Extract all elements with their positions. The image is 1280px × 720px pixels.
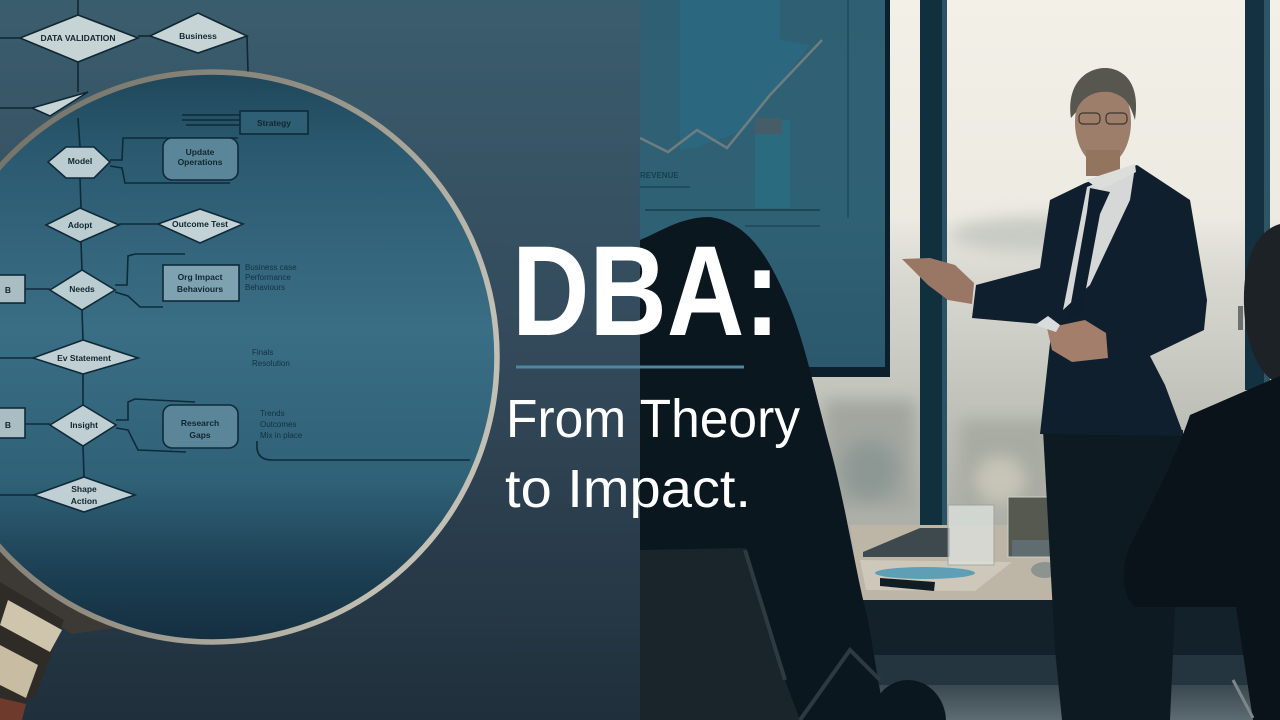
flowchart labels: Action — [71, 496, 97, 506]
flowchart labels: Shape — [71, 484, 97, 494]
subtitle line two: to Impact. — [505, 459, 751, 519]
hair — [1070, 68, 1136, 120]
lens — [0, 74, 495, 640]
flowchart labels: Finals — [252, 348, 273, 357]
flowchart behind lens: Business — [179, 31, 217, 41]
flowchart labels: Mix in place — [260, 431, 303, 440]
flowchart labels: B — [5, 420, 11, 430]
flowchart labels: B — [5, 285, 11, 295]
window frames — [920, 0, 1270, 526]
tie — [1071, 188, 1110, 302]
flowchart labels: Adopt — [68, 220, 92, 230]
flowchart behind lens — [0, 0, 248, 116]
flowchart labels: Ev Statement — [57, 353, 111, 363]
flowchart labels: Trends — [260, 409, 285, 418]
flowchart labels: Outcome Test — [172, 219, 228, 229]
glasses — [1079, 113, 1127, 124]
flowchart labels: Insight — [70, 420, 98, 430]
magnifying glass — [0, 72, 497, 720]
flowchart labels: Strategy — [257, 118, 291, 128]
flowchart labels: Business case — [245, 263, 297, 272]
face — [1075, 92, 1131, 157]
flowchart labels: Behaviours — [245, 283, 285, 292]
trousers — [1043, 430, 1183, 720]
water glasses — [948, 496, 1051, 578]
silhouette: seated woman foreground — [640, 217, 946, 720]
panel: left slate background — [0, 0, 640, 720]
flowchart labels: Performance — [245, 273, 291, 282]
flowchart labels — [5, 118, 303, 506]
accent divider line — [516, 366, 744, 368]
flowchart labels: Model — [68, 156, 92, 166]
chair — [640, 548, 800, 720]
laptop on table — [863, 528, 950, 557]
flowchart labels: Operations — [178, 157, 223, 167]
jacket — [972, 165, 1207, 436]
subtitle line one: From Theory — [506, 389, 800, 449]
lens ring — [0, 72, 497, 642]
flowchart labels: Research — [181, 418, 219, 428]
flowchart behind lens: DATA VALIDATION — [40, 33, 116, 43]
holding hand — [1047, 320, 1108, 362]
title: DBA: DBA: — [512, 220, 780, 363]
flowchart labels: Org Impact — [178, 272, 223, 282]
paper with blue chart — [860, 560, 1012, 591]
presentation screen with line chart: REVENUE — [640, 171, 679, 180]
flowchart labels: Resolution — [252, 359, 290, 368]
magnifier handle — [0, 540, 115, 720]
flowchart labels: Behaviours — [177, 284, 223, 294]
presenter in navy suit — [902, 68, 1207, 720]
shirt — [1063, 167, 1135, 310]
panel: boardroom photo scene — [640, 0, 1280, 720]
flowchart labels: Needs — [69, 284, 95, 294]
flowchart labels: Update — [186, 147, 215, 157]
flowchart labels: Outcomes — [260, 420, 296, 429]
conference table — [850, 497, 1280, 720]
flowchart labels: Gaps — [189, 430, 211, 440]
silhouette: seated man foreground — [1124, 224, 1280, 720]
hazy city view through window — [820, 211, 1048, 510]
pointing hand — [902, 258, 974, 304]
magnified flowchart — [0, 111, 470, 512]
presentation screen with line chart — [640, 0, 890, 377]
